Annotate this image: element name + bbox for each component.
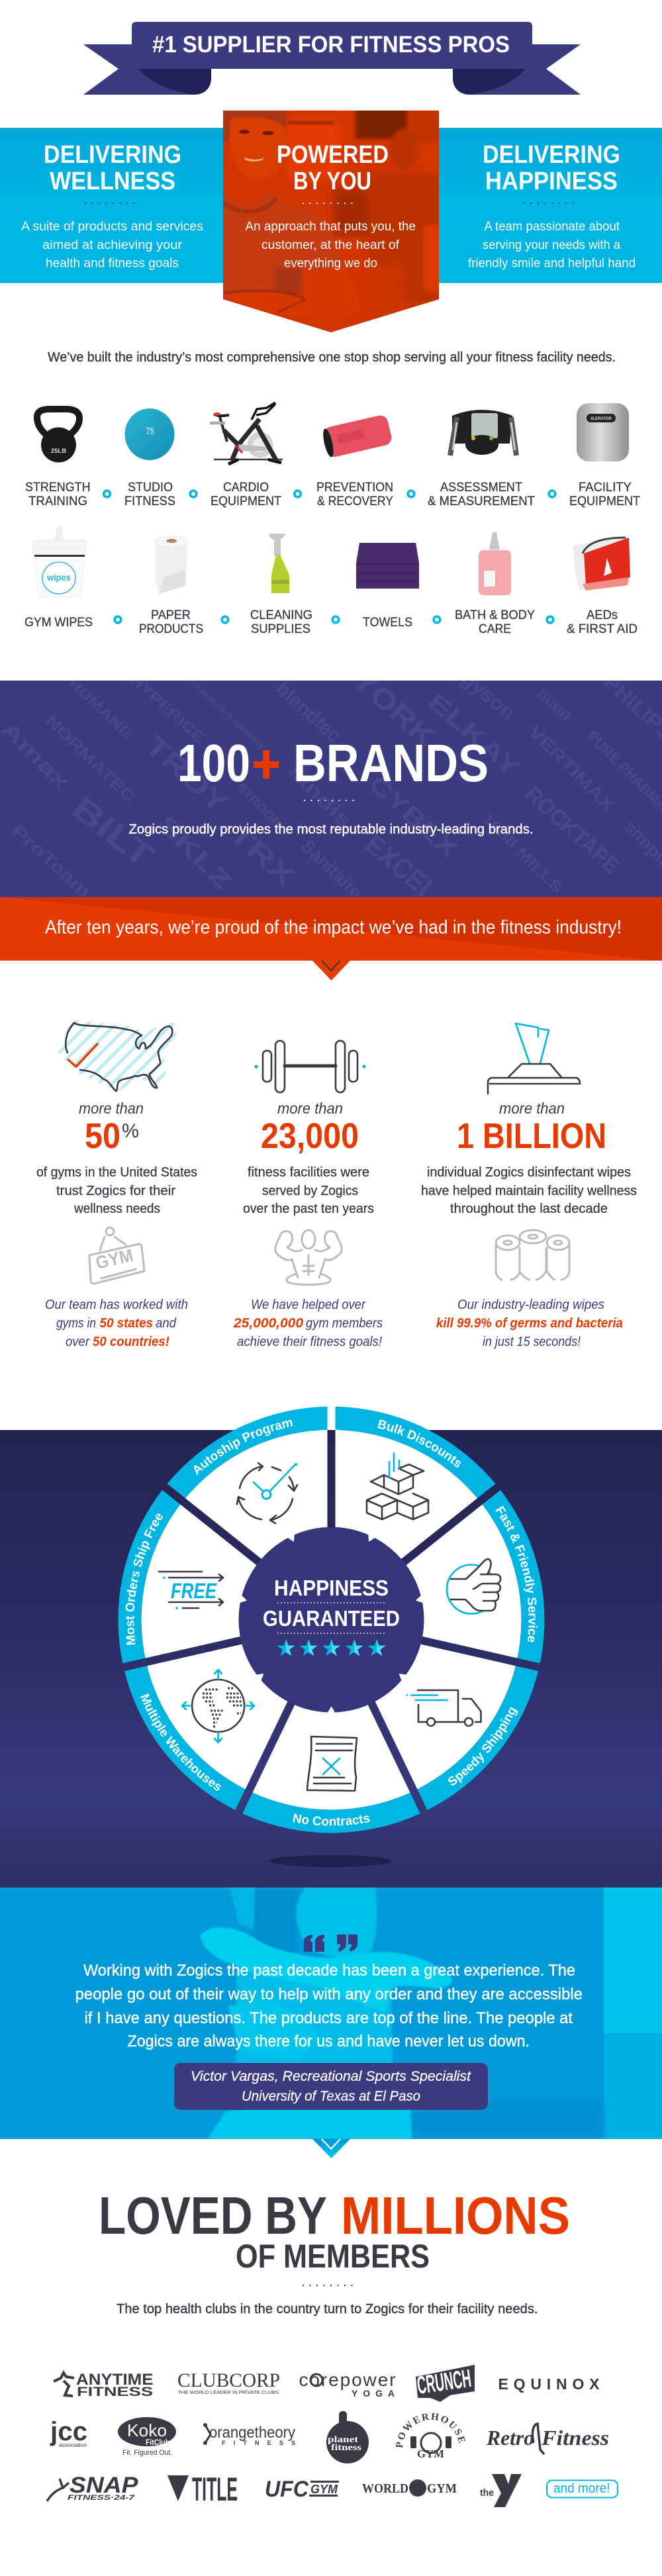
product labels: first row: TRAINING xyxy=(28,494,87,508)
quote text xyxy=(75,1962,583,2050)
text: members helped xyxy=(233,1298,383,1349)
product icon: spray bottle xyxy=(269,534,289,593)
panel: delivering happiness: friendly smile and helpful hand xyxy=(468,256,636,270)
segment labels: No Contracts xyxy=(293,1813,369,1826)
logo: retro fitness: Fitness xyxy=(541,2426,609,2450)
background photo xyxy=(200,1887,662,2139)
heading: 100+ brands: BRANDS xyxy=(293,734,489,792)
brand watermarks: the anderson company xyxy=(187,675,267,751)
stat: 50 percent: % xyxy=(122,1120,139,1142)
logo: ufc gym: UFC xyxy=(265,2477,308,2502)
icon: gym sign: GYM xyxy=(94,1245,135,1273)
text: kill germs: Our industry-leading wipes xyxy=(457,1298,604,1312)
brand watermarks: STROOP xyxy=(234,781,283,830)
segment: autoship program xyxy=(167,1406,327,1559)
banner: ten years impact xyxy=(0,897,662,980)
product labels: second row: TOWELS xyxy=(363,615,412,630)
logo: koko fitclub xyxy=(118,2417,176,2457)
brand watermarks: CYBEX xyxy=(364,769,463,863)
stat: 1 billion: throughout the last decade xyxy=(450,1202,608,1216)
text: gyms worked with: and xyxy=(156,1316,177,1331)
logo: equinox: EQUINOX xyxy=(498,2375,600,2393)
stat: 50 percent: 50 xyxy=(85,1116,120,1156)
stat: 50 percent: wellness needs xyxy=(73,1202,160,1216)
stat: 23,000: over the past ten years xyxy=(243,1202,374,1216)
logo: planet fitness: fitness xyxy=(331,2443,362,2453)
segment: no contracts xyxy=(242,1705,420,1833)
stat: 50 percent: more than xyxy=(79,1100,144,1117)
text: one stop shop tagline: We’ve built the industry’s most comprehensive one stop shop serving all your fitness facility needs. xyxy=(48,350,616,365)
panel: testimonial xyxy=(0,1887,662,2158)
product icon: towels xyxy=(356,543,419,589)
icon: delivery truck xyxy=(406,1690,481,1726)
logo: retro fitness xyxy=(486,2424,609,2454)
logo: world gym xyxy=(362,2479,457,2497)
text: TITLE xyxy=(192,2471,238,2508)
stat: 1 billion: individual Zogics disinfectant wipes xyxy=(427,1165,631,1180)
chart: service wheel xyxy=(118,1406,544,1833)
segment: multiple warehouses xyxy=(124,1645,287,1810)
logo: the ymca xyxy=(480,2474,522,2507)
product icon: kettlebell xyxy=(37,409,79,462)
text: gyms worked with: gyms in xyxy=(56,1316,96,1331)
product icon: paper towel roll xyxy=(155,536,188,594)
panel: blue strip xyxy=(0,128,662,283)
product icon: hand dryer xyxy=(577,403,629,461)
banner: ten years impact: After ten years, we’re proud of the impact we’ve had in the fitness industry! xyxy=(45,917,622,938)
panel: delivering happiness: HAPPINESS xyxy=(485,167,618,195)
text: kill germs xyxy=(436,1298,623,1349)
logo: ufc gym xyxy=(265,2477,339,2502)
logo: anytime fitness: ANYTIME xyxy=(76,2371,154,2389)
quote text: people go out of their way to help with any order and they are accessible xyxy=(75,1985,583,2003)
panel: powered by you: everything we do xyxy=(284,256,377,270)
attribution box xyxy=(174,2063,488,2110)
brand watermarks: nuun xyxy=(534,683,577,725)
panel: powered by you: POWERED xyxy=(277,141,389,169)
product labels: first row: PREVENTION xyxy=(316,480,393,495)
text: top health clubs: The top health clubs in the country turn to Zogics for their facility needs. xyxy=(117,2302,538,2316)
stat: 1 billion: more than xyxy=(499,1100,565,1117)
banner: #1 supplier xyxy=(83,22,581,95)
product labels: first row: STUDIO xyxy=(128,480,173,495)
logo: snap fitness: SNAP xyxy=(70,2473,138,2498)
brand watermarks: gyson xyxy=(457,667,519,724)
text: members helped: 25,000,000 xyxy=(233,1316,303,1331)
brand watermarks: ProTeam xyxy=(8,820,95,902)
shadow under wheel xyxy=(269,1855,391,1867)
segment labels: Autoship Program xyxy=(193,1419,293,1475)
segment: most orders ship free xyxy=(118,1490,257,1663)
stat: 50 percent: trust Zogics for their xyxy=(56,1184,175,1198)
logo: corepower yoga: YOGA xyxy=(352,2388,395,2399)
logo: world gym: WORLD xyxy=(362,2481,408,2496)
panel: delivering happiness: serving your needs with a xyxy=(483,238,620,252)
logo: crunch: CRUNCH xyxy=(415,2365,473,2400)
logo: snap fitness: FITNESS·24-7 xyxy=(68,2494,135,2502)
product labels: first row: FITNESS xyxy=(124,494,175,508)
icon: usa map xyxy=(58,1020,177,1091)
icon: free shipping: FREE xyxy=(171,1579,217,1603)
icon: dumbbell xyxy=(254,1041,366,1092)
product icon: kettlebell: 25LB xyxy=(51,448,66,455)
product labels: first row: ASSESSMENT xyxy=(440,480,522,495)
brand watermarks: NORMATEC xyxy=(42,712,139,806)
product labels: first row: STRENGTH xyxy=(25,480,90,495)
product labels: second row: CARE xyxy=(479,622,511,636)
brand watermarks: ROCKTAPE xyxy=(520,782,624,879)
icon: free shipping xyxy=(159,1572,223,1609)
logo: koko fitclub: FitClub xyxy=(146,2438,169,2447)
segment labels xyxy=(126,1419,538,1826)
icon: cancelled contract xyxy=(307,1737,357,1791)
product labels: second row: GYM WIPES xyxy=(24,615,93,630)
logo: orangetheory: FITNESS xyxy=(222,2440,295,2446)
product icon: wipes bucket xyxy=(33,526,86,597)
hub: GUARANTEED xyxy=(263,1606,400,1631)
product labels: first row: FACILITY xyxy=(579,480,632,495)
logo: planet fitness xyxy=(326,2411,369,2463)
photo: smiling man duotone xyxy=(223,106,444,338)
panel: delivering wellness: WELLNESS xyxy=(50,167,175,195)
brand watermarks: VERTIMAX xyxy=(525,722,619,816)
product labels: second row: CLEANING xyxy=(250,608,312,622)
segment labels: Speedy Shipping xyxy=(448,1707,518,1786)
panel: 100+ brands xyxy=(0,681,662,897)
product labels: first row: EQUIPMENT xyxy=(569,494,640,508)
icon: thumbs up xyxy=(447,1559,500,1614)
separators: first row rings xyxy=(104,491,555,497)
logo: the ymca: the xyxy=(480,2487,494,2499)
logo: orangetheory xyxy=(203,2423,295,2446)
brand watermarks: SKLZ xyxy=(152,810,237,895)
product labels: second row: PAPER xyxy=(151,608,191,622)
panel: delivering wellness xyxy=(21,141,203,270)
logo: powerhouse gym: GYM xyxy=(417,2448,444,2460)
product icon: wipes bucket: wipes xyxy=(46,572,71,583)
heading: 100+ brands xyxy=(177,734,489,792)
brand watermarks: blendtec xyxy=(271,678,346,747)
text: gyms worked with: Our team has worked with xyxy=(45,1298,188,1312)
panel: delivering wellness: DELIVERING xyxy=(44,141,181,169)
product labels: second row: SUPPLIES xyxy=(251,622,310,636)
brand watermarks: TRX xyxy=(224,819,300,892)
logo: and more: and more! xyxy=(553,2481,610,2496)
quote text: Working with Zogics the past decade has been a great experience. The xyxy=(83,1962,575,1980)
brand watermarks: HYPERICE xyxy=(127,671,208,746)
separators: second row rings xyxy=(115,616,553,623)
segment labels: Fast & Friendly Service xyxy=(495,1505,538,1642)
logo: anytime fitness: FITNESS xyxy=(77,2385,153,2399)
brand watermarks: landis xyxy=(284,761,355,832)
panel: delivering wellness: health and fitness goals xyxy=(46,256,179,270)
panel: delivering wellness: A suite of products and services xyxy=(21,219,203,234)
wheel segments xyxy=(118,1406,544,1833)
text: gyms worked with xyxy=(45,1298,188,1349)
panel: powered by you: BY YOU xyxy=(293,167,371,195)
logo: koko fitclub: Koko xyxy=(127,2420,167,2440)
product icon: studio ball: 75 xyxy=(146,426,154,437)
product labels: second row: & FIRST AID xyxy=(567,622,638,636)
product icon: body composition device xyxy=(450,410,516,455)
segment labels: Most Orders Ship Free xyxy=(126,1513,163,1645)
logo: jcc association: jcc xyxy=(50,2417,87,2446)
heading: loved by millions: MILLIONS xyxy=(341,2186,570,2245)
text: members helped: gym members xyxy=(306,1316,383,1331)
text: gyms worked with: 50 states xyxy=(99,1316,153,1331)
segment: fast and friendly service xyxy=(406,1490,544,1663)
hub: HAPPINESS xyxy=(274,1576,389,1600)
logo: snap fitness xyxy=(47,2473,138,2502)
brand watermarks: Sanitaire xyxy=(297,835,366,903)
panel: 100+ brands: Zogics proudly provides the most reputable industry-leading brands. xyxy=(128,822,534,837)
panel: delivering happiness xyxy=(468,141,636,270)
text: gyms worked with: 50 countries! xyxy=(93,1335,169,1349)
logo: jcc association: association xyxy=(59,2442,87,2448)
brand watermarks: 1088 MILLS xyxy=(479,810,565,896)
stat: 23,000: more than xyxy=(277,1100,343,1117)
text: members helped: achieve their fitness goals! xyxy=(237,1335,382,1349)
logo: retro fitness: Retro xyxy=(486,2426,534,2450)
quote marks xyxy=(304,1934,357,1952)
logo: world gym: GYM xyxy=(427,2481,457,2496)
stat: 1 billion: have helped maintain facility wellness xyxy=(421,1184,637,1198)
quote text: if I have any questions. The products are top of the line. The people at xyxy=(85,2009,573,2027)
segment labels: Bulk Discounts xyxy=(377,1419,461,1467)
panel: delivering happiness: A team passionate about xyxy=(485,219,620,234)
panel: powered by you: An approach that puts you, the xyxy=(245,219,416,234)
product labels: second row: PRODUCTS xyxy=(139,622,203,636)
icon: paper rolls xyxy=(496,1230,569,1280)
segment: bulk discounts xyxy=(335,1406,495,1559)
text: members helped: We have helped over xyxy=(251,1298,366,1312)
logo: ufc gym: GYM xyxy=(310,2483,338,2496)
heading: loved by millions: LOVED BY xyxy=(99,2186,327,2245)
product labels: first row: & RECOVERY xyxy=(317,494,393,508)
logo: clubcorp: CLUBCORP xyxy=(177,2369,280,2391)
icon: autoship clock xyxy=(237,1463,297,1523)
segment labels: Multiple Warehouses xyxy=(140,1693,221,1791)
brand watermarks: BILT xyxy=(65,789,161,875)
icon: stacked boxes xyxy=(367,1453,428,1519)
stat: 1 billion: 1 BILLION xyxy=(457,1116,606,1156)
logo: orangetheory: orangetheory xyxy=(209,2424,295,2442)
stat: 50 percent xyxy=(36,1100,197,1216)
brand watermarks: ELKAY xyxy=(423,687,526,782)
logo: title boxing xyxy=(167,2471,238,2508)
hub xyxy=(238,1527,424,1713)
brand watermarks xyxy=(0,663,662,907)
text: kill germs: kill 99.9% of germs and bacteria xyxy=(436,1316,623,1331)
product labels: first row: EQUIPMENT xyxy=(211,494,281,508)
heading: 100+ brands: 100 xyxy=(177,734,250,792)
stat: 23,000: fitness facilities were xyxy=(248,1165,369,1180)
stat: 50 percent: of gyms in the United States xyxy=(36,1165,197,1180)
logo: crunch xyxy=(415,2365,475,2402)
product icon: foam roller xyxy=(321,414,393,459)
product labels: second row xyxy=(24,608,638,636)
logo: koko fitclub: Fit. Figured Out. xyxy=(122,2449,172,2457)
product labels: first row: & MEASUREMENT xyxy=(428,494,535,508)
text: gyms worked with: over xyxy=(66,1335,90,1349)
stat: 23,000: served by Zogics xyxy=(262,1184,358,1198)
panel: powered by you xyxy=(223,106,444,338)
stat: 1 billion xyxy=(421,1100,637,1216)
stat: 23,000: 23,000 xyxy=(261,1116,359,1156)
product icon: hand dryer: XLERATOR xyxy=(591,417,612,421)
product icon: studio ball xyxy=(124,408,175,460)
product labels: first row xyxy=(25,480,640,508)
product labels: second row: BATH & BODY xyxy=(455,608,535,622)
icon: wipe dispenser xyxy=(488,1024,580,1094)
segment: speedy shipping xyxy=(375,1645,538,1810)
attribution box: University of Texas at El Paso xyxy=(242,2089,420,2104)
quote text: Zogics are always there for us and have never let us down. xyxy=(127,2032,530,2050)
logo: planet fitness: planet xyxy=(328,2435,358,2445)
product labels: first row: CARDIO xyxy=(223,480,269,495)
logo: clubcorp: THE WORLD LEADER IN PRIVATE CLUBS xyxy=(178,2389,279,2395)
stars xyxy=(277,1639,385,1656)
text: kill germs: in just 15 seconds! xyxy=(483,1335,581,1349)
product icon: AED kit xyxy=(573,537,630,591)
panel: powered by you: customer, at the heart of xyxy=(261,238,400,252)
product icon: soap dispenser xyxy=(479,532,511,595)
heading: loved by millions xyxy=(99,2186,570,2285)
panel: delivering wellness: aimed at achieving your xyxy=(42,238,183,252)
panel: delivering happiness: DELIVERING xyxy=(483,141,620,169)
icon: globe warehouses xyxy=(182,1670,254,1742)
brand watermarks: HUMANE xyxy=(66,676,134,741)
logo: anytime fitness xyxy=(54,2371,154,2399)
logo: powerhouse gym: POWERHOUSE xyxy=(396,2412,465,2448)
stat: 23,000 xyxy=(243,1100,374,1216)
icon: gym sign xyxy=(89,1227,144,1284)
attribution box: Victor Vargas, Recreational Sports Specialist xyxy=(191,2069,471,2084)
icon: bodybuilder xyxy=(275,1230,342,1284)
banner: #1 supplier: #1 SUPPLIER FOR FITNESS PROS xyxy=(152,32,510,58)
brand watermarks: EXCEL xyxy=(359,828,445,907)
panel: happiness guaranteed background xyxy=(0,1430,662,1887)
logo: corepower yoga: corepower xyxy=(299,2369,396,2390)
heading: loved by millions: OF MEMBERS xyxy=(236,2238,430,2275)
brand watermarks: TROY xyxy=(140,730,234,819)
brand watermarks: YORK xyxy=(347,663,442,753)
product labels: second row: AEDs xyxy=(587,608,618,622)
product icon: spin bike xyxy=(210,403,283,464)
arrow: down pointer xyxy=(312,2139,350,2158)
